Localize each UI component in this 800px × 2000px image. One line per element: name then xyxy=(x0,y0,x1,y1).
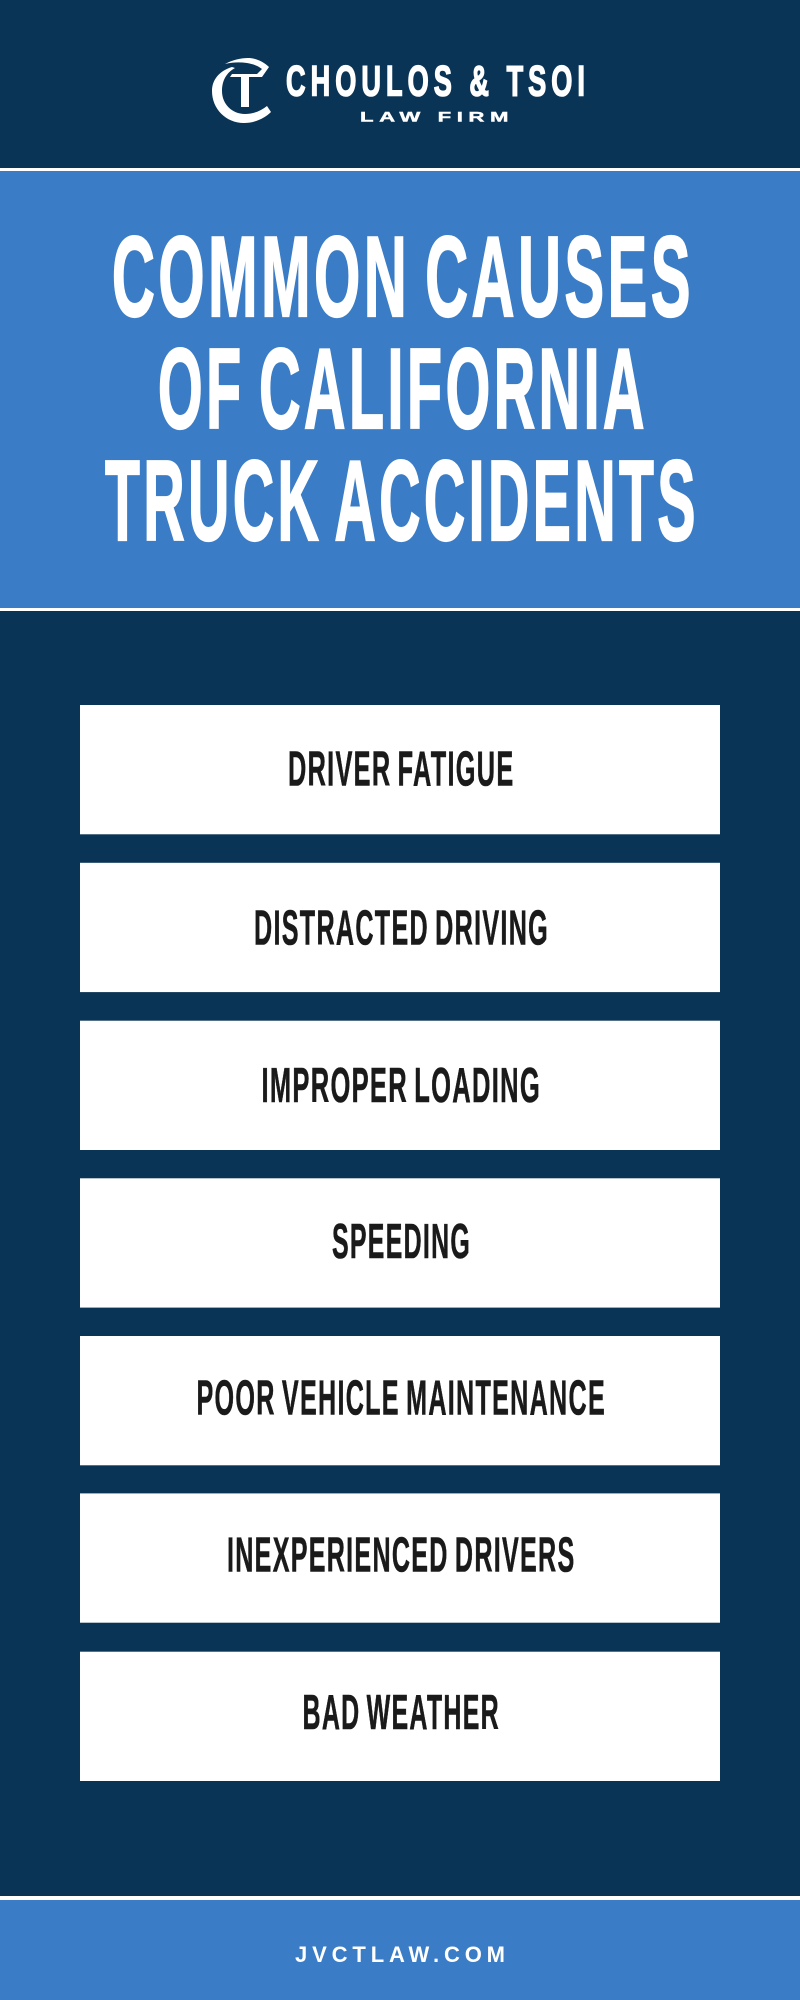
header: logo xyxy=(212,58,590,124)
logo subtitle: LAW FIRM xyxy=(360,108,514,124)
card: bad weather: BAD WEATHER xyxy=(302,1686,500,1740)
card: inexperienced drivers xyxy=(80,1493,720,1623)
title panel xyxy=(0,168,800,611)
card: distracted driving xyxy=(80,863,720,992)
logo name: CHOULOS & TSOI xyxy=(286,58,590,106)
card: driver fatigue xyxy=(80,705,720,834)
footer url: JVCTLAW.COM xyxy=(295,1942,505,1967)
card: driver fatigue: DRIVER FATIGUE xyxy=(288,742,514,796)
footer xyxy=(0,1896,800,2000)
card: speeding xyxy=(80,1178,720,1308)
card: speeding: SPEEDING xyxy=(332,1215,471,1269)
icon: CT monogram xyxy=(212,58,271,123)
title xyxy=(105,214,699,565)
card: improper loading xyxy=(80,1021,720,1150)
card: poor vehicle maintenance xyxy=(80,1336,720,1465)
card: improper loading: IMPROPER LOADING xyxy=(262,1059,541,1113)
card: bad weather xyxy=(80,1652,720,1781)
